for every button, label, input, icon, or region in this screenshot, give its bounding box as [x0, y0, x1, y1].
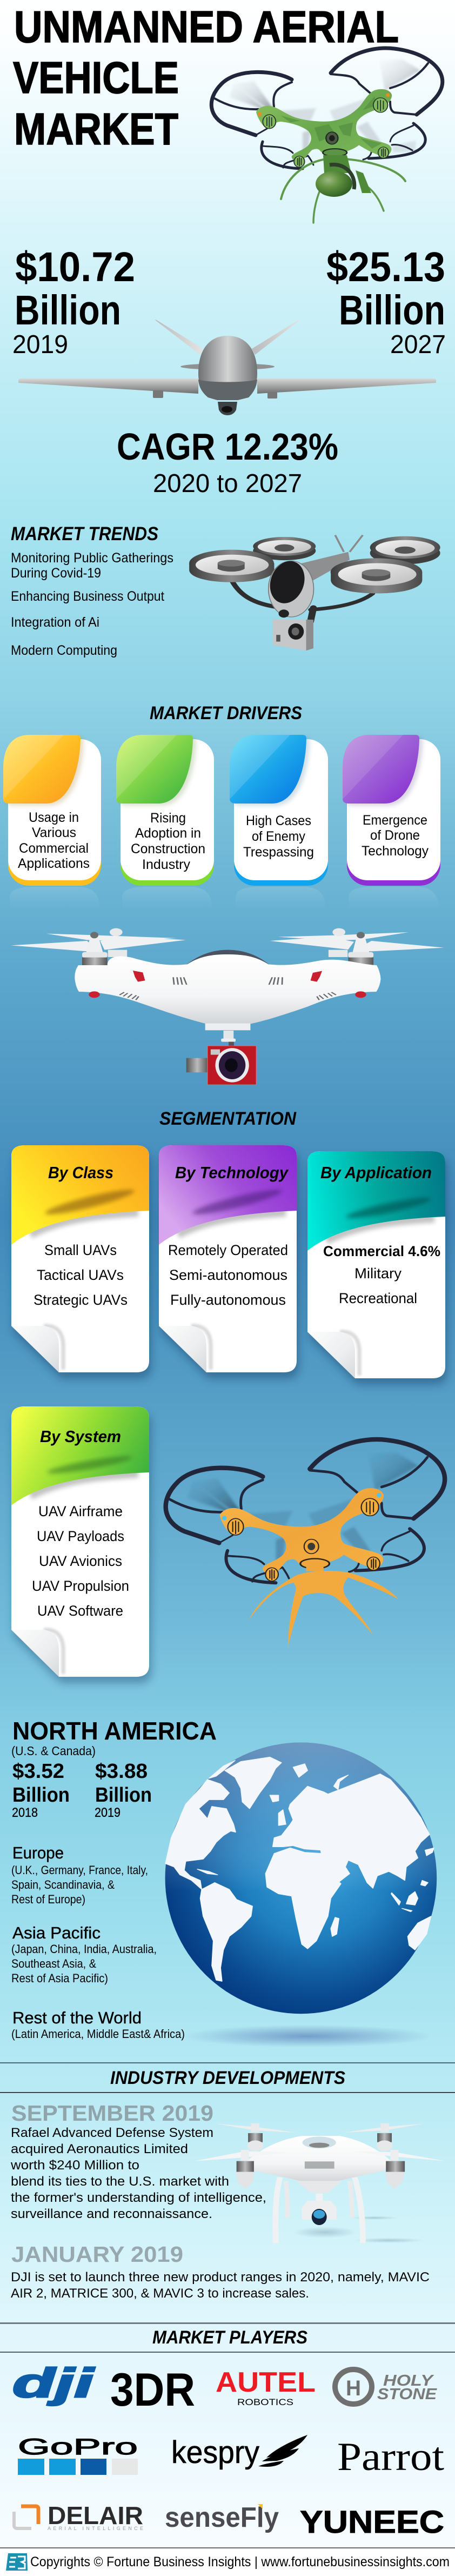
logo: delair: AERIAL INTELLIGENCE [48, 2526, 143, 2531]
rear rotors [253, 536, 440, 565]
panel: driver 2 construction [116, 735, 214, 886]
vent [305, 2161, 334, 2169]
development: september 2019: blend its ties to the U.S. market with [11, 2174, 229, 2189]
sensor dome [186, 950, 270, 965]
CAGR: CAGR 12.23% [117, 426, 338, 468]
development: september 2019: worth $240 Million to [10, 2158, 139, 2173]
region: europe: Spain, Scandinavia, & [11, 1878, 115, 1891]
panel: by system: UAV Propulsion [32, 1578, 129, 1594]
logo: gopro [18, 2434, 138, 2475]
heading: segmentation: SEGMENTATION [159, 1108, 297, 1129]
front legs [276, 2177, 363, 2243]
panel: driver 4 drone technology [343, 735, 440, 886]
logo: sensefly: senseFly [165, 2502, 279, 2533]
region: europe: Rest of Europe) [11, 1893, 85, 1906]
panel: by class: By Class [48, 1163, 113, 1182]
market trends list: Enhancing Business Output [11, 589, 164, 604]
panel: driver 3 enemy trespassing [230, 735, 328, 886]
panel: driver 2 construction: Adoption in [135, 826, 201, 841]
panel: by system [11, 1406, 151, 1683]
right front rotor [331, 558, 422, 593]
action camera [273, 619, 313, 650]
market trends list: Monitoring Public Gatherings [11, 550, 173, 566]
panel: by system: By System [40, 1427, 121, 1446]
icon: fortune business insights logo [6, 2553, 28, 2571]
support arcs [232, 581, 373, 621]
panel: by application: By Application [320, 1163, 432, 1182]
icon: globe [165, 1743, 437, 2047]
propellers and guards [166, 1439, 445, 1583]
footer [0, 2547, 455, 2576]
market sizes north america: $3.52 [12, 1760, 64, 1783]
rear legs [286, 2181, 352, 2218]
panel: by class: Tactical UAVs [37, 1267, 124, 1283]
payload ball [316, 155, 371, 197]
market size 2027: 2027 [390, 330, 446, 359]
drone shell [241, 2136, 398, 2182]
panel: driver 3 enemy trespassing: High Cases [246, 813, 311, 828]
panel: driver 1 usage in commercial applications: Applications [18, 856, 90, 871]
panel: by technology: Semi-autonomous [169, 1267, 287, 1283]
panel: driver 2 construction: Rising [150, 811, 186, 826]
development: september 2019 [10, 2101, 266, 2221]
market sizes north america: (U.S. & Canada) [11, 1744, 96, 1758]
panel: by system: UAV Payloads [37, 1528, 124, 1544]
heading: market players: MARKET PLAYERS [152, 2327, 307, 2348]
panel: by technology: Remotely Operated [168, 1242, 288, 1258]
panel: driver 4 drone technology: of Drone [370, 828, 420, 843]
development: september 2019: Rafael Advanced Defense System [11, 2126, 213, 2140]
panel: by system: UAV Software [37, 1603, 123, 1619]
propeller blur fans [188, 1453, 418, 1565]
propeller guards [166, 1439, 445, 1583]
region: europe [11, 1843, 148, 1906]
title [13, 2, 399, 154]
region: asia pacific: Asia Pacific [12, 1923, 101, 1942]
antennas [335, 535, 363, 552]
rear rotors [216, 2123, 423, 2151]
logo: autel robotics: ROBOTICS [237, 2397, 293, 2407]
drone shell [75, 954, 381, 1024]
development: january 2019: JANUARY 2019 [11, 2242, 183, 2267]
market sizes north america: $3.88 [95, 1760, 148, 1783]
icon: grey drone with action camera [189, 535, 440, 650]
wings [18, 379, 198, 394]
title: UNMANNED AERIAL [14, 2, 399, 52]
red camera [186, 1046, 256, 1085]
top opening [303, 2136, 336, 2148]
panel: by application: Commercial 4.6% [323, 1243, 440, 1259]
logo: yuneec: YUNEEC [300, 2505, 444, 2540]
logo: kespry: kespry [171, 2435, 259, 2470]
front rotors [195, 2150, 445, 2189]
panel: by technology [159, 1145, 299, 1379]
tail boom [293, 552, 350, 581]
panel: by application: Recreational [339, 1290, 417, 1306]
logo: holy stone: HOLY [383, 2372, 434, 2389]
logo: kespry [171, 2435, 307, 2470]
panel: by class: Small UAVs [44, 1242, 117, 1258]
panel: driver 2 construction: Construction [131, 841, 205, 857]
continents [165, 1757, 434, 1981]
fuselage [198, 336, 257, 400]
gimbal camera [296, 2181, 343, 2225]
market trends list: During Covid-19 [11, 566, 101, 581]
logo: dji: dji [12, 2360, 95, 2406]
vents [119, 977, 336, 1000]
development: january 2019: DJI is set to launch three new product ranges in 2020, namely, MAVIC [11, 2270, 430, 2285]
panel: by class: Strategic UAVs [34, 1292, 128, 1308]
left front rotor [189, 550, 274, 582]
development: january 2019 [11, 2242, 430, 2301]
logo: holy stone: STONE [377, 2386, 438, 2403]
gimbal mount [205, 1024, 250, 1046]
region: asia pacific: Southeast Asia, & [11, 1957, 96, 1970]
panel: driver 4 drone technology: Emergence [363, 813, 427, 828]
propeller blur fans [230, 59, 420, 154]
market trends list [11, 523, 173, 658]
market sizes north america: NORTH AMERICA [12, 1717, 217, 1745]
market trends list: Integration of Ai [11, 615, 99, 630]
logo: gopro: GoPro [18, 2434, 138, 2459]
region: asia pacific: Rest of Asia Pacific) [11, 1971, 108, 1985]
market size 2019: Billion [15, 287, 121, 334]
development: september 2019: SEPTEMBER 2019 [11, 2101, 213, 2126]
logo: autel robotics: AUTEL [216, 2367, 316, 2398]
sensor turret [218, 402, 237, 415]
red indicator lights [89, 971, 366, 998]
panel: driver 4 drone technology: Technology [362, 844, 429, 859]
icon: white landing drone [195, 2123, 445, 2243]
card reflections [10, 887, 439, 909]
front motors [82, 932, 373, 965]
panel: by application: Military [354, 1265, 402, 1282]
propellers [11, 928, 444, 952]
landing legs [281, 158, 405, 223]
logo: 3DR: 3DR [110, 2364, 195, 2416]
logo: delair [14, 2501, 143, 2531]
panel: by system: UAV Airframe [38, 1503, 123, 1519]
globe shadow [183, 2025, 432, 2047]
rear motors [108, 950, 347, 957]
panel: by technology: Fully-autonomous [170, 1292, 286, 1308]
logo: holy stone: H [346, 2376, 361, 2400]
drone body, nacelles and skid [220, 1488, 398, 1649]
engine pods [153, 390, 163, 398]
stabilizer [180, 363, 275, 370]
pod body [266, 559, 313, 618]
market sizes north america [11, 1717, 217, 1820]
panel: driver 1 usage in commercial applications: Commercial [19, 841, 89, 856]
region: europe: (U.K., Germany, France, Italy, [11, 1863, 148, 1877]
panel: by class [11, 1145, 151, 1379]
market size 2019: $10.72 [15, 244, 135, 290]
panel: by system: UAV Avionics [39, 1553, 122, 1569]
drone body with nacelles [256, 89, 392, 167]
panel: driver 1 usage in commercial applications: Various [32, 825, 76, 840]
panel: driver 1 usage in commercial applications: Usage in [29, 810, 79, 825]
globe sphere [165, 1743, 437, 2014]
ground shadows [293, 2227, 357, 2238]
market size 2027 [326, 244, 446, 359]
panel: by technology: By Technology [175, 1163, 289, 1182]
development: september 2019: acquired Aeronautics Limited [11, 2142, 188, 2156]
market sizes north america: 2019 [95, 1805, 121, 1820]
market sizes north america: Billion [12, 1784, 70, 1807]
region: rest of the world [11, 2008, 185, 2041]
heading: market players [0, 2322, 455, 2353]
CAGR [117, 426, 338, 498]
icon: orange quadcopter [166, 1439, 445, 1649]
panel: driver 1 usage in commercial applications [3, 735, 101, 886]
icon: green camouflage quadcopter [211, 48, 443, 223]
panel: driver 3 enemy trespassing: of Enemy [252, 829, 305, 844]
region: europe: Europe [12, 1843, 64, 1862]
title: VEHICLE [13, 52, 179, 103]
market trends list: MARKET TRENDS [11, 523, 158, 545]
logo: delair: DELAIR [48, 2501, 143, 2529]
panel: driver 2 construction: Industry [142, 857, 190, 872]
panel: driver 3 enemy trespassing: Trespassing [243, 845, 314, 860]
icon: white drone with red camera [11, 928, 444, 1085]
development: january 2019: AIR 2, MATRICE 300, & MAVIC 3 to increase sales. [11, 2286, 309, 2301]
market size 2019 [12, 244, 135, 359]
logo: holy stone [335, 2369, 438, 2404]
tail fins [155, 320, 203, 355]
market size 2019: 2019 [12, 330, 68, 359]
heading: industry developments: INDUSTRY DEVELOPMENTS [110, 2068, 345, 2088]
region: rest of the world: Rest of the World [12, 2008, 142, 2027]
heading: market drivers: MARKET DRIVERS [150, 703, 302, 723]
icon: grey fixed-wing UAV [18, 320, 436, 415]
market sizes north america: 2018 [12, 1805, 38, 1820]
panel: by application [307, 1151, 447, 1385]
region: rest of the world: (Latin America, Middle East& Africa) [11, 2027, 185, 2041]
propeller guards [211, 48, 443, 169]
development: september 2019: surveillance and reconnaissance. [11, 2207, 212, 2221]
development: september 2019: the former's understanding of intelligence, [11, 2190, 266, 2205]
market trends list: Modern Computing [11, 643, 117, 658]
logo: parrot: Parrot [337, 2435, 444, 2479]
region: asia pacific: (Japan, China, India, Australia, [11, 1942, 157, 1956]
CAGR: 2020 to 2027 [153, 469, 302, 498]
market size 2027: $25.13 [326, 244, 445, 290]
region: asia pacific [11, 1923, 157, 1985]
title: MARKET [14, 104, 178, 154]
market sizes north america: Billion [95, 1784, 152, 1807]
